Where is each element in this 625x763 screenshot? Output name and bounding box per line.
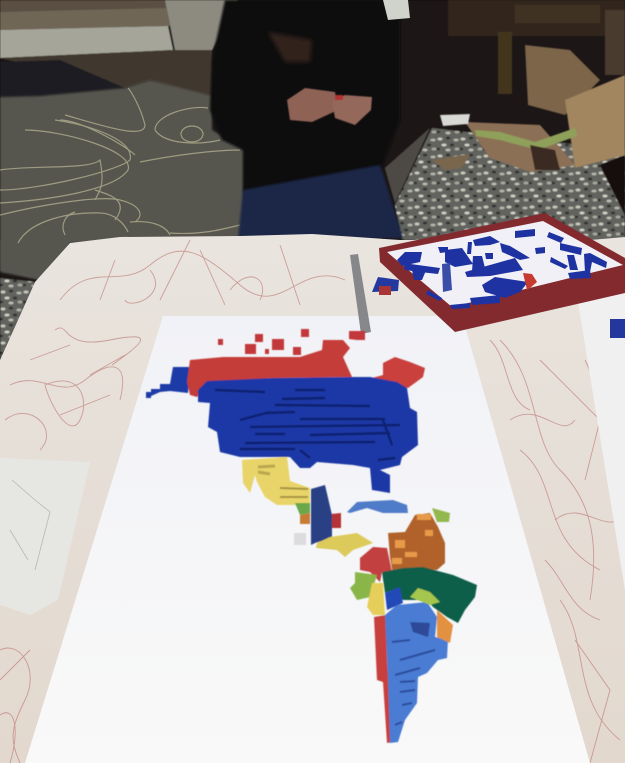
map: Mexico, yellow xyxy=(242,457,310,505)
person: face xyxy=(268,32,312,62)
map: Arctic islands xyxy=(218,329,365,355)
South America: orange highlights xyxy=(392,514,433,564)
South America: dark green xyxy=(382,567,477,623)
South America: orange east xyxy=(437,610,453,643)
map: Canada, red xyxy=(187,340,352,397)
left sheet of paper xyxy=(0,458,90,615)
map: Caribbean, light blue xyxy=(347,500,408,513)
loose bricks by the tray xyxy=(372,277,399,295)
metal ruler xyxy=(350,254,371,334)
map: pale grey brick xyxy=(294,533,306,545)
South America: lime patches xyxy=(410,588,440,605)
South America: light blue xyxy=(385,602,448,743)
cloth with red map drawings xyxy=(0,234,625,763)
tray: red box xyxy=(379,213,625,332)
South America: dark blue inset xyxy=(410,622,430,637)
South America: green west xyxy=(350,572,377,600)
map: Greenland, red xyxy=(372,357,425,388)
tray of blue bricks xyxy=(379,213,625,332)
map: USA, blue xyxy=(198,377,418,493)
tray: white interior xyxy=(387,221,623,307)
South America: lime top xyxy=(432,508,450,522)
blue brick on right sheet xyxy=(610,319,625,338)
rug xyxy=(0,80,245,280)
person: shirt tag xyxy=(383,0,410,20)
tray: red brick xyxy=(523,273,537,290)
tray: standing brick xyxy=(442,263,452,292)
South America: red strip xyxy=(374,615,393,743)
person: sweater xyxy=(210,0,400,192)
main white poster board xyxy=(25,316,590,763)
LEGO map xyxy=(146,329,477,743)
wooden furniture top right xyxy=(448,0,625,94)
person: hands xyxy=(287,88,372,125)
map: Alaska, blue xyxy=(146,367,190,398)
South America: red Colombia xyxy=(360,547,392,582)
South America: brick shadows xyxy=(392,640,435,725)
map: Central America xyxy=(295,485,373,557)
South America: mid blue xyxy=(385,587,403,610)
person: jeans xyxy=(238,165,403,240)
map: South America xyxy=(350,508,477,743)
right sheet of paper xyxy=(578,292,625,590)
South America: yellow xyxy=(367,583,385,615)
South America: northern orange xyxy=(388,513,445,575)
person xyxy=(210,0,410,240)
tray: blue bricks xyxy=(397,229,607,309)
brown paper bags xyxy=(432,45,625,215)
